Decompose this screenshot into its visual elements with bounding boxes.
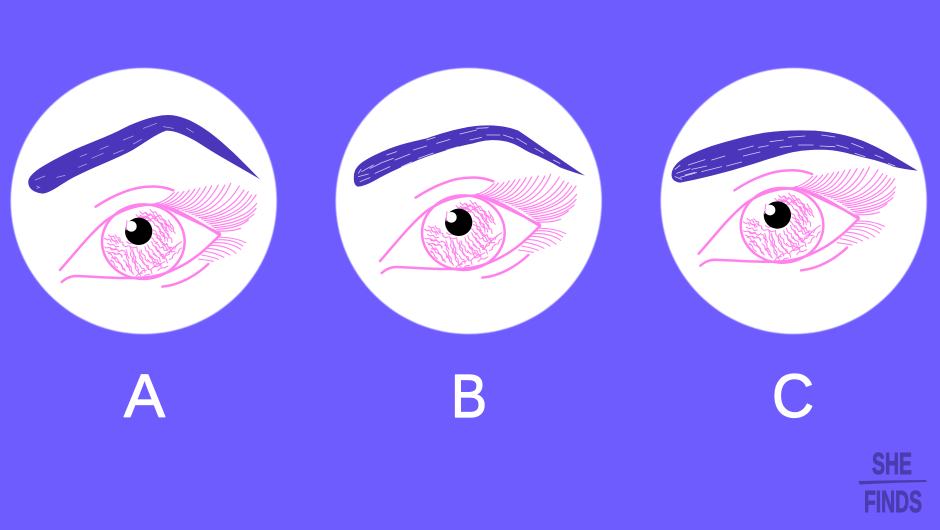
label C: C <box>772 362 814 430</box>
eye C <box>699 167 895 270</box>
eye A <box>60 183 257 287</box>
panel: option A <box>11 68 277 334</box>
panel: option B <box>336 68 602 334</box>
white circle A <box>11 68 277 334</box>
label B: B <box>451 362 487 430</box>
label A: A <box>124 362 165 430</box>
eyebrow C: thick flat arch <box>672 130 918 183</box>
panel: option C <box>661 68 927 334</box>
logo divider <box>859 480 926 484</box>
eye B <box>380 174 577 278</box>
logo: She Finds <box>859 447 926 519</box>
white circle B <box>336 68 602 334</box>
logo word SHE: SHE <box>872 447 912 481</box>
eyebrow B: soft arch <box>354 125 585 187</box>
white circle C <box>661 68 927 334</box>
eyebrow A: high angled arch <box>28 115 260 194</box>
